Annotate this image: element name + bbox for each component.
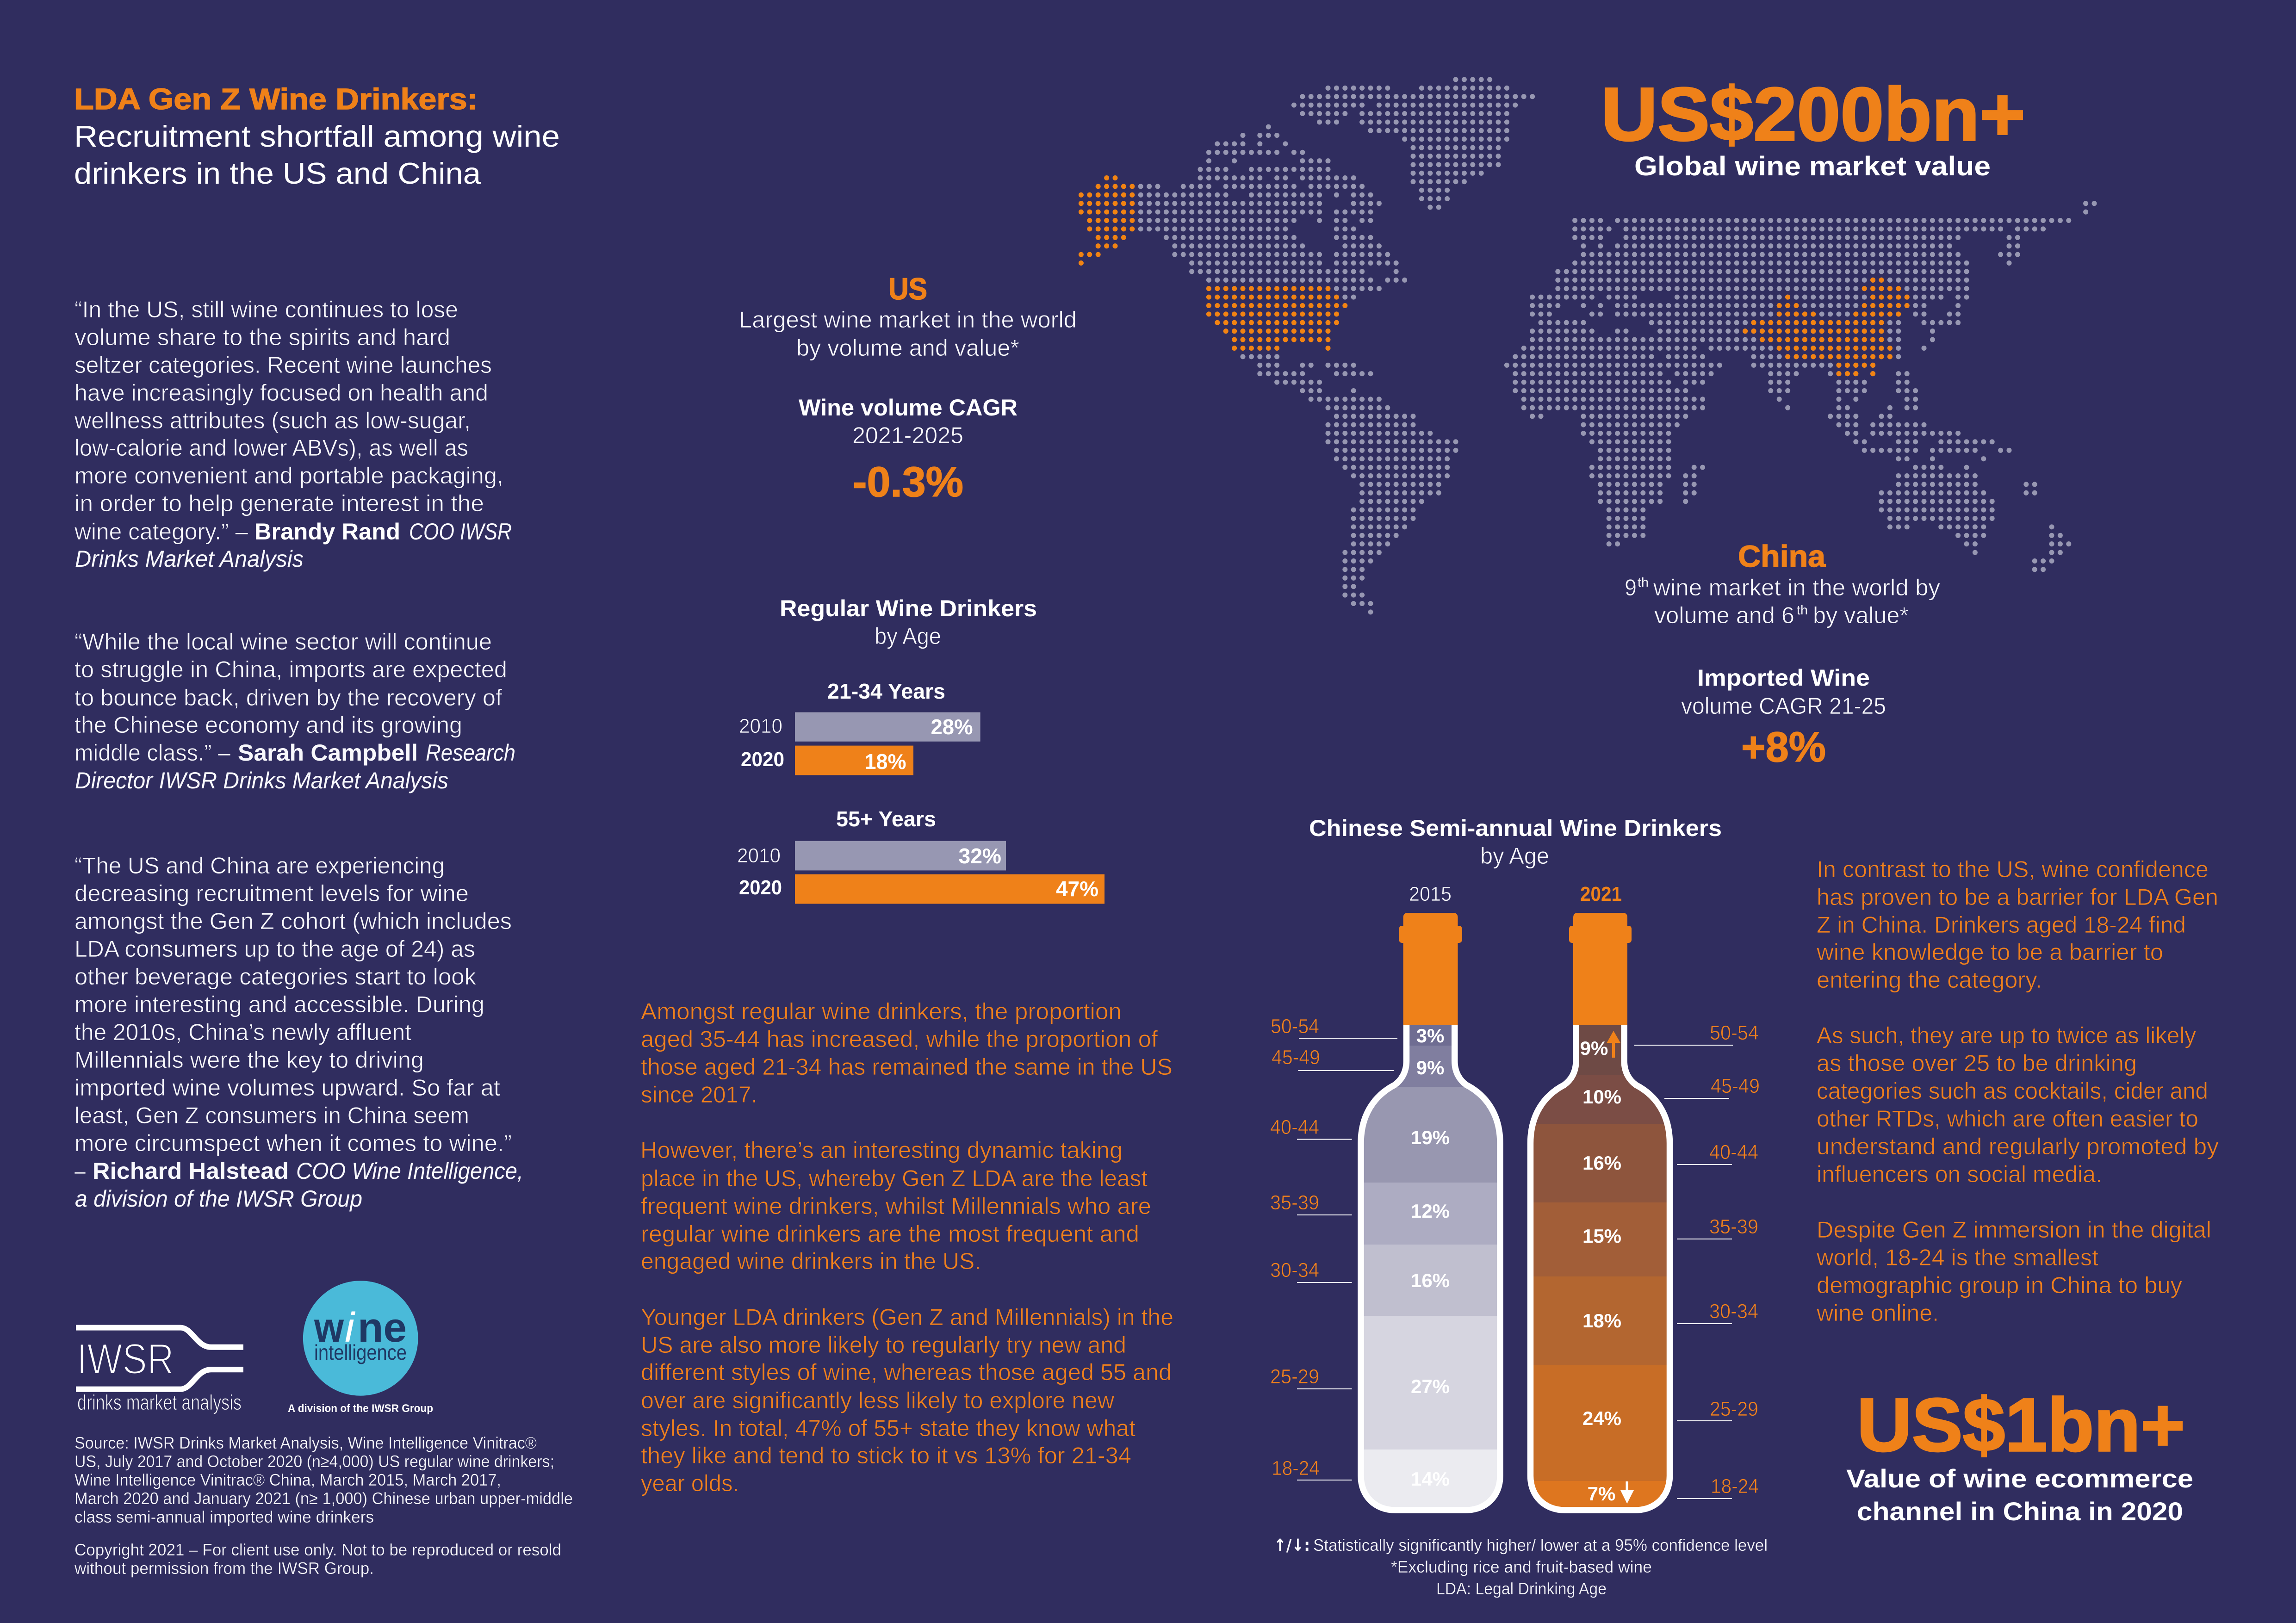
logo: wine intelligence: w bbox=[314, 1305, 344, 1351]
body text: China analysis: influencers on social media. bbox=[1817, 1161, 2102, 1187]
bar chart: regular wine drinkers by age: 32% bbox=[959, 844, 1001, 868]
logo: wine intelligence bbox=[288, 1281, 433, 1415]
quote: Sarah Campbell: to bounce back, driven by the recovery of bbox=[74, 685, 502, 711]
title bbox=[74, 82, 560, 190]
China summary: volume and 6 bbox=[1654, 602, 1794, 628]
bar chart: regular wine drinkers by age: 47% bbox=[1056, 877, 1098, 901]
quote: Richard Halstead: a division of the IWSR Group bbox=[75, 1186, 362, 1212]
bottle chart: 2015: 19% bbox=[1411, 1127, 1450, 1148]
age labels: 2021: 30-34 bbox=[1709, 1300, 1758, 1323]
quote: Richard Halstead: decreasing recruitment levels for wine bbox=[74, 880, 469, 906]
quote: Brandy Rand: in order to help generate interest in the bbox=[74, 490, 484, 516]
bottle chart: 2021: 15% bbox=[1582, 1225, 1621, 1247]
quote: Richard Halstead: amongst the Gen Z cohort (which includes bbox=[74, 908, 512, 934]
body text: US analysis: However, there’s an interesting dynamic taking bbox=[640, 1137, 1123, 1163]
age labels: 2021: 25-29 bbox=[1710, 1398, 1758, 1420]
map: land dots bbox=[1141, 127, 2094, 612]
stat: wine ecommerce channel value: channel in China in 2020 bbox=[1857, 1497, 2183, 1526]
age labels: 2015 bbox=[1270, 1015, 1397, 1480]
footnotes: Statistically significantly higher/ lower at a 95% confidence level bbox=[1313, 1536, 1768, 1555]
quote: Brandy Rand: wine category.” – bbox=[74, 519, 248, 545]
copyright note: Copyright 2021 – For client use only. Not to be reproduced or resold bbox=[74, 1540, 561, 1559]
body text: China analysis: Z in China. Drinkers aged 18-24 find bbox=[1817, 912, 2186, 938]
bottle chart: 2021: 10% bbox=[1582, 1086, 1621, 1108]
body text: China analysis: As such, they are up to twice as likely bbox=[1817, 1022, 2196, 1048]
title: Recruitment shortfall among wine bbox=[74, 119, 560, 153]
China summary: th bbox=[1797, 603, 1808, 617]
source note: US, July 2017 and October 2020 (n≥4,000) US regular wine drinkers; bbox=[74, 1452, 554, 1471]
body text: US analysis bbox=[640, 998, 1173, 1496]
China summary: volume CAGR 21-25 bbox=[1681, 693, 1886, 719]
quote: Richard Halstead: imported wine volumes upward. So far at bbox=[74, 1075, 500, 1101]
quote: Richard Halstead bbox=[74, 853, 523, 1212]
dotted world map bbox=[1081, 80, 2094, 612]
US summary bbox=[739, 272, 1077, 506]
body text: US analysis: US are also more likely to regularly try new and bbox=[641, 1332, 1126, 1358]
quote: Richard Halstead: LDA consumers up to the age of 24) as bbox=[74, 936, 475, 962]
age labels: 2015: 18-24 bbox=[1272, 1457, 1320, 1480]
footnotes: *Excluding rice and fruit-based wine bbox=[1391, 1557, 1652, 1576]
body text: China analysis: Despite Gen Z immersion in the digital bbox=[1817, 1217, 2211, 1243]
title: LDA Gen Z Wine Drinkers: bbox=[74, 82, 478, 116]
source note bbox=[74, 1433, 573, 1526]
quote: Sarah Campbell: middle class.” – bbox=[74, 740, 230, 766]
body text: US analysis: regular wine drinkers are the most frequent and bbox=[641, 1221, 1139, 1247]
bottle chart: 2021: 24% bbox=[1582, 1407, 1621, 1429]
bottle chart: 2015: 12% bbox=[1411, 1200, 1450, 1222]
map: Greenland dots bbox=[1294, 80, 1533, 207]
bar chart: regular wine drinkers by age: 55+ Years bbox=[836, 807, 936, 831]
bottle chart: 2021: 18% bbox=[1582, 1310, 1621, 1332]
quote: Richard Halstead: more interesting and accessible. During bbox=[74, 991, 484, 1017]
quote: Brandy Rand: low-calorie and lower ABVs), as well as bbox=[74, 435, 468, 461]
quote: Brandy Rand: more convenient and portable packaging, bbox=[74, 463, 503, 489]
body text: US analysis: styles. In total, 47% of 55+ state they know what bbox=[641, 1415, 1136, 1441]
bar chart: regular wine drinkers by age: 2010 bbox=[737, 844, 781, 867]
bottle chart: 2015 bbox=[1356, 883, 1506, 1514]
age labels: 2021: 45-49 bbox=[1711, 1075, 1760, 1097]
age labels: 2021: 50-54 bbox=[1710, 1022, 1759, 1044]
US summary: Wine volume CAGR bbox=[799, 395, 1018, 421]
bar chart: regular wine drinkers by age: 18% bbox=[864, 750, 906, 774]
heading: Chinese semi-annual wine drinkers: Chinese Semi-annual Wine Drinkers bbox=[1309, 815, 1722, 841]
body text: US analysis: engaged wine drinkers in the US. bbox=[641, 1248, 981, 1274]
body text: US analysis: they like and tend to stick to it vs 13% for 21-34 bbox=[641, 1443, 1131, 1468]
quote: Richard Halstead: more circumspect when it comes to wine.” bbox=[74, 1130, 512, 1156]
body text: China analysis: entering the category. bbox=[1817, 967, 2042, 993]
bottle chart: 2015: 2015 bbox=[1409, 883, 1452, 905]
bar chart: regular wine drinkers by age bbox=[737, 595, 1105, 904]
footnotes: LDA: Legal Drinking Age bbox=[1436, 1579, 1607, 1598]
logo: IWSR drinks market analysis: IWSR bbox=[77, 1335, 174, 1383]
body text: China analysis: wine knowledge to be a barrier to bbox=[1816, 939, 2163, 965]
body text: US analysis: different styles of wine, whereas those aged 55 and bbox=[641, 1359, 1172, 1385]
icon: down arrow bbox=[1620, 1481, 1634, 1504]
bar chart: regular wine drinkers by age: 2020 bbox=[741, 748, 784, 771]
body text: US analysis: aged 35-44 has increased, while the proportion of bbox=[641, 1026, 1158, 1052]
stat: wine ecommerce channel value bbox=[1846, 1382, 2193, 1526]
quote: Sarah Campbell: to struggle in China, imports are expected bbox=[74, 657, 507, 682]
logo: wine intelligence: i bbox=[345, 1305, 356, 1351]
body text: US analysis: year olds. bbox=[641, 1470, 739, 1496]
China summary: +8% bbox=[1741, 724, 1826, 771]
body text: US analysis: Amongst regular wine drinkers, the proportion bbox=[641, 998, 1122, 1024]
body text: US analysis: Younger LDA drinkers (Gen Z and Millennials) in the bbox=[641, 1304, 1173, 1330]
title: drinkers in the US and China bbox=[74, 156, 481, 190]
US summary: 2021-2025 bbox=[852, 422, 963, 448]
bar chart: regular wine drinkers by age: 28% bbox=[931, 715, 973, 739]
bottle chart: 2015: 27% bbox=[1411, 1375, 1450, 1397]
stat: global wine market value: US$200bn+ bbox=[1601, 72, 2025, 156]
bottle chart: 2021: 7% bbox=[1588, 1483, 1615, 1505]
quote: Sarah Campbell: the Chinese economy and its growing bbox=[74, 712, 462, 738]
quote: Sarah Campbell: Research bbox=[426, 740, 515, 766]
quote: Sarah Campbell: Director IWSR Drinks Market Analysis bbox=[75, 768, 448, 793]
body text: China analysis: other RTDs, which are often easier to bbox=[1817, 1106, 2198, 1132]
heading: Chinese semi-annual wine drinkers bbox=[1309, 815, 1722, 869]
bottle chart: 2021 bbox=[1525, 883, 1675, 1514]
age labels: 2015: 50-54 bbox=[1271, 1015, 1319, 1038]
bottle chart: 2015: 14% bbox=[1411, 1468, 1450, 1490]
body text: China analysis: as those over 25 to be drinking bbox=[1817, 1050, 2137, 1076]
footnotes bbox=[1274, 1536, 1768, 1598]
China summary: by value* bbox=[1813, 602, 1909, 628]
copyright note bbox=[74, 1540, 561, 1578]
body text: US analysis: frequent wine drinkers, whilst Millennials who are bbox=[641, 1193, 1151, 1219]
quote: Richard Halstead: COO Wine Intelligence, bbox=[296, 1158, 523, 1184]
bottle chart: 2021: 9% bbox=[1580, 1037, 1608, 1059]
China summary bbox=[1625, 539, 1940, 771]
quote: Richard Halstead: least, Gen Z consumers in China seem bbox=[74, 1103, 469, 1128]
bottle chart: 2021: 16% bbox=[1582, 1152, 1621, 1174]
quote: Sarah Campbell: “While the local wine sector will continue bbox=[74, 629, 492, 655]
stat: global wine market value: Global wine market value bbox=[1634, 151, 1991, 181]
quote: Brandy Rand: have increasingly focused on health and bbox=[74, 380, 488, 406]
age labels: 2015: 25-29 bbox=[1270, 1365, 1319, 1388]
quote: Brandy Rand bbox=[74, 297, 512, 572]
body text: China analysis: wine online. bbox=[1816, 1300, 1939, 1326]
quote: Brandy Rand: “In the US, still wine continues to lose bbox=[74, 297, 458, 322]
age labels: 2015: 35-39 bbox=[1270, 1191, 1319, 1214]
stat: wine ecommerce channel value: US$1bn+ bbox=[1857, 1382, 2185, 1467]
quote: Richard Halstead: the 2010s, China’s newly affluent bbox=[74, 1019, 411, 1045]
quote: Sarah Campbell: Sarah Campbell bbox=[238, 740, 418, 766]
body text: China analysis: categories such as cocktails, cider and bbox=[1817, 1078, 2208, 1104]
body text: China analysis: world, 18-24 is the smallest bbox=[1816, 1245, 2098, 1270]
China summary: th bbox=[1638, 575, 1649, 589]
bottle chart: 2015: 16% bbox=[1411, 1270, 1450, 1291]
US summary: by volume and value* bbox=[796, 335, 1019, 361]
US summary: -0.3% bbox=[853, 458, 963, 506]
body text: US analysis: since 2017. bbox=[641, 1082, 757, 1108]
source note: Source: IWSR Drinks Market Analysis, Wine Intelligence Vinitrac® bbox=[74, 1433, 537, 1452]
copyright note: without permission from the IWSR Group. bbox=[74, 1559, 374, 1578]
quote: Sarah Campbell bbox=[74, 629, 515, 793]
quote: Brandy Rand: wellness attributes (such as low-sugar, bbox=[74, 408, 471, 434]
quote: Brandy Rand: seltzer categories. Recent wine launches bbox=[74, 352, 492, 378]
US summary: US bbox=[888, 272, 927, 306]
body text: China analysis: understand and regularly promoted by bbox=[1817, 1134, 2219, 1159]
China summary: China bbox=[1738, 539, 1826, 573]
map: highlighted US dots bbox=[1081, 178, 1345, 348]
logo: wine intelligence: intelligence bbox=[314, 1340, 407, 1364]
age labels: 2015: 40-44 bbox=[1270, 1116, 1319, 1139]
bar chart: regular wine drinkers by age: Regular Wine Drinkers bbox=[780, 595, 1037, 621]
age labels: 2021 bbox=[1634, 1022, 1760, 1499]
source note: March 2020 and January 2021 (n≥ 1,000) Chinese urban upper-middle bbox=[74, 1489, 573, 1508]
quote: Richard Halstead: – bbox=[74, 1158, 86, 1184]
age labels: 2021: 35-39 bbox=[1709, 1215, 1758, 1238]
stat: wine ecommerce channel value: Value of wine ecommerce bbox=[1846, 1464, 2193, 1493]
quote: Brandy Rand: Brandy Rand bbox=[254, 519, 400, 545]
body text: China analysis: In contrast to the US, wine confidence bbox=[1817, 856, 2209, 882]
footnotes: ↑/↓: bbox=[1274, 1536, 1310, 1555]
body text: US analysis: over are significantly less likely to explore new bbox=[641, 1388, 1115, 1413]
age labels: 2015: 45-49 bbox=[1272, 1046, 1320, 1069]
body text: US analysis: place in the US, whereby Gen Z LDA are the least bbox=[641, 1165, 1148, 1191]
bar chart: regular wine drinkers by age: 2020 bbox=[739, 876, 782, 899]
age labels: 2021: 40-44 bbox=[1709, 1141, 1758, 1164]
logo: wine intelligence: A division of the IWSR Group bbox=[288, 1402, 433, 1415]
logo: IWSR drinks market analysis: drinks market analysis bbox=[77, 1390, 242, 1414]
bar chart: regular wine drinkers by age: by Age bbox=[875, 623, 941, 649]
quote: Brandy Rand: COO IWSR bbox=[409, 519, 512, 545]
quote: Richard Halstead: Millennials were the key to driving bbox=[74, 1047, 424, 1073]
age labels: 2015: 30-34 bbox=[1270, 1259, 1319, 1282]
quote: Brandy Rand: Drinks Market Analysis bbox=[75, 546, 304, 572]
logo: IWSR drinks market analysis bbox=[76, 1328, 243, 1414]
US summary: Largest wine market in the world bbox=[739, 307, 1077, 333]
source note: class semi-annual imported wine drinkers bbox=[74, 1507, 374, 1526]
bottle chart: 2015: 9% bbox=[1416, 1057, 1444, 1078]
body text: US analysis: those aged 21-34 has remained the same in the US bbox=[641, 1054, 1173, 1080]
body text: China analysis: demographic group in China to buy bbox=[1817, 1272, 2182, 1298]
map: highlighted China dots bbox=[1745, 280, 1907, 374]
source note: Wine Intelligence Vinitrac® China, March 2015, March 2017, bbox=[74, 1470, 501, 1489]
quote: Richard Halstead: “The US and China are experiencing bbox=[74, 853, 445, 879]
logo: wine intelligence: ne bbox=[358, 1305, 407, 1351]
bottle chart: 2015: 3% bbox=[1416, 1025, 1444, 1047]
icon: up arrow bbox=[1607, 1031, 1620, 1058]
heading: Chinese semi-annual wine drinkers: by Age bbox=[1480, 843, 1549, 869]
body text: China analysis: has proven to be a barrier for LDA Gen bbox=[1817, 884, 2218, 910]
bottle chart: 2021: 2021 bbox=[1580, 883, 1622, 905]
body text: China analysis bbox=[1816, 856, 2219, 1326]
bar chart: regular wine drinkers by age: 21-34 Years bbox=[827, 679, 945, 703]
quote: Richard Halstead: Richard Halstead bbox=[93, 1158, 289, 1184]
bar chart: regular wine drinkers by age: 2010 bbox=[739, 715, 782, 737]
China summary: wine market in the world by bbox=[1653, 575, 1940, 601]
quote: Brandy Rand: volume share to the spirits and hard bbox=[74, 324, 450, 350]
China summary: Imported Wine bbox=[1697, 665, 1870, 691]
China summary: 9 bbox=[1625, 575, 1637, 601]
age labels: 2021: 18-24 bbox=[1711, 1475, 1759, 1498]
quote: Richard Halstead: other beverage categories start to look bbox=[74, 964, 477, 990]
